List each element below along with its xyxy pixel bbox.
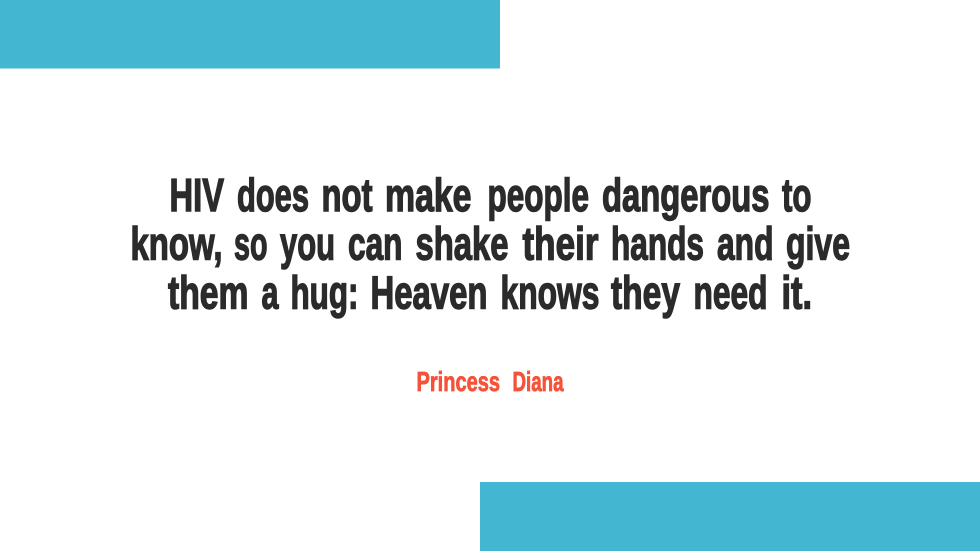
quote line 2: hands (611, 218, 704, 270)
quote line 3 (168, 266, 812, 318)
quote line 1: does (237, 169, 309, 221)
quote line 3: them (168, 266, 248, 318)
quote line 3: Heaven (370, 266, 488, 318)
quote line 3: knows (500, 266, 600, 318)
quote line 2: so (234, 218, 268, 270)
quote attribution: Princess (416, 366, 500, 397)
quote line 1: to (782, 169, 812, 221)
quote line 3: a (262, 266, 279, 318)
quote line 3: need (694, 266, 768, 318)
quote line 1: HIV (170, 169, 224, 221)
top-left blue banner (0, 0, 500, 68)
bottom-right blue banner (480, 482, 980, 551)
quote line 1: dangerous (602, 169, 770, 221)
quote line 1: people (488, 169, 589, 221)
quote line 3: hug: (290, 266, 358, 318)
quote line 1 (170, 169, 812, 221)
quote line 2 (130, 218, 850, 270)
quote line 3: they (611, 266, 680, 318)
quote line 2: shake (416, 218, 508, 270)
quote line 2: give (786, 218, 850, 270)
quote line 3: it. (782, 266, 812, 318)
quote line 2: you (280, 218, 335, 270)
quote line 2: their (522, 218, 599, 270)
quote line 2: know, (130, 218, 222, 270)
quote line 1: make (385, 169, 472, 221)
quote text (130, 169, 850, 318)
quote line 1: not (322, 169, 372, 221)
quote line 2: can (348, 218, 402, 270)
quote attribution: Diana (512, 366, 564, 397)
quote line 2: and (717, 218, 774, 270)
